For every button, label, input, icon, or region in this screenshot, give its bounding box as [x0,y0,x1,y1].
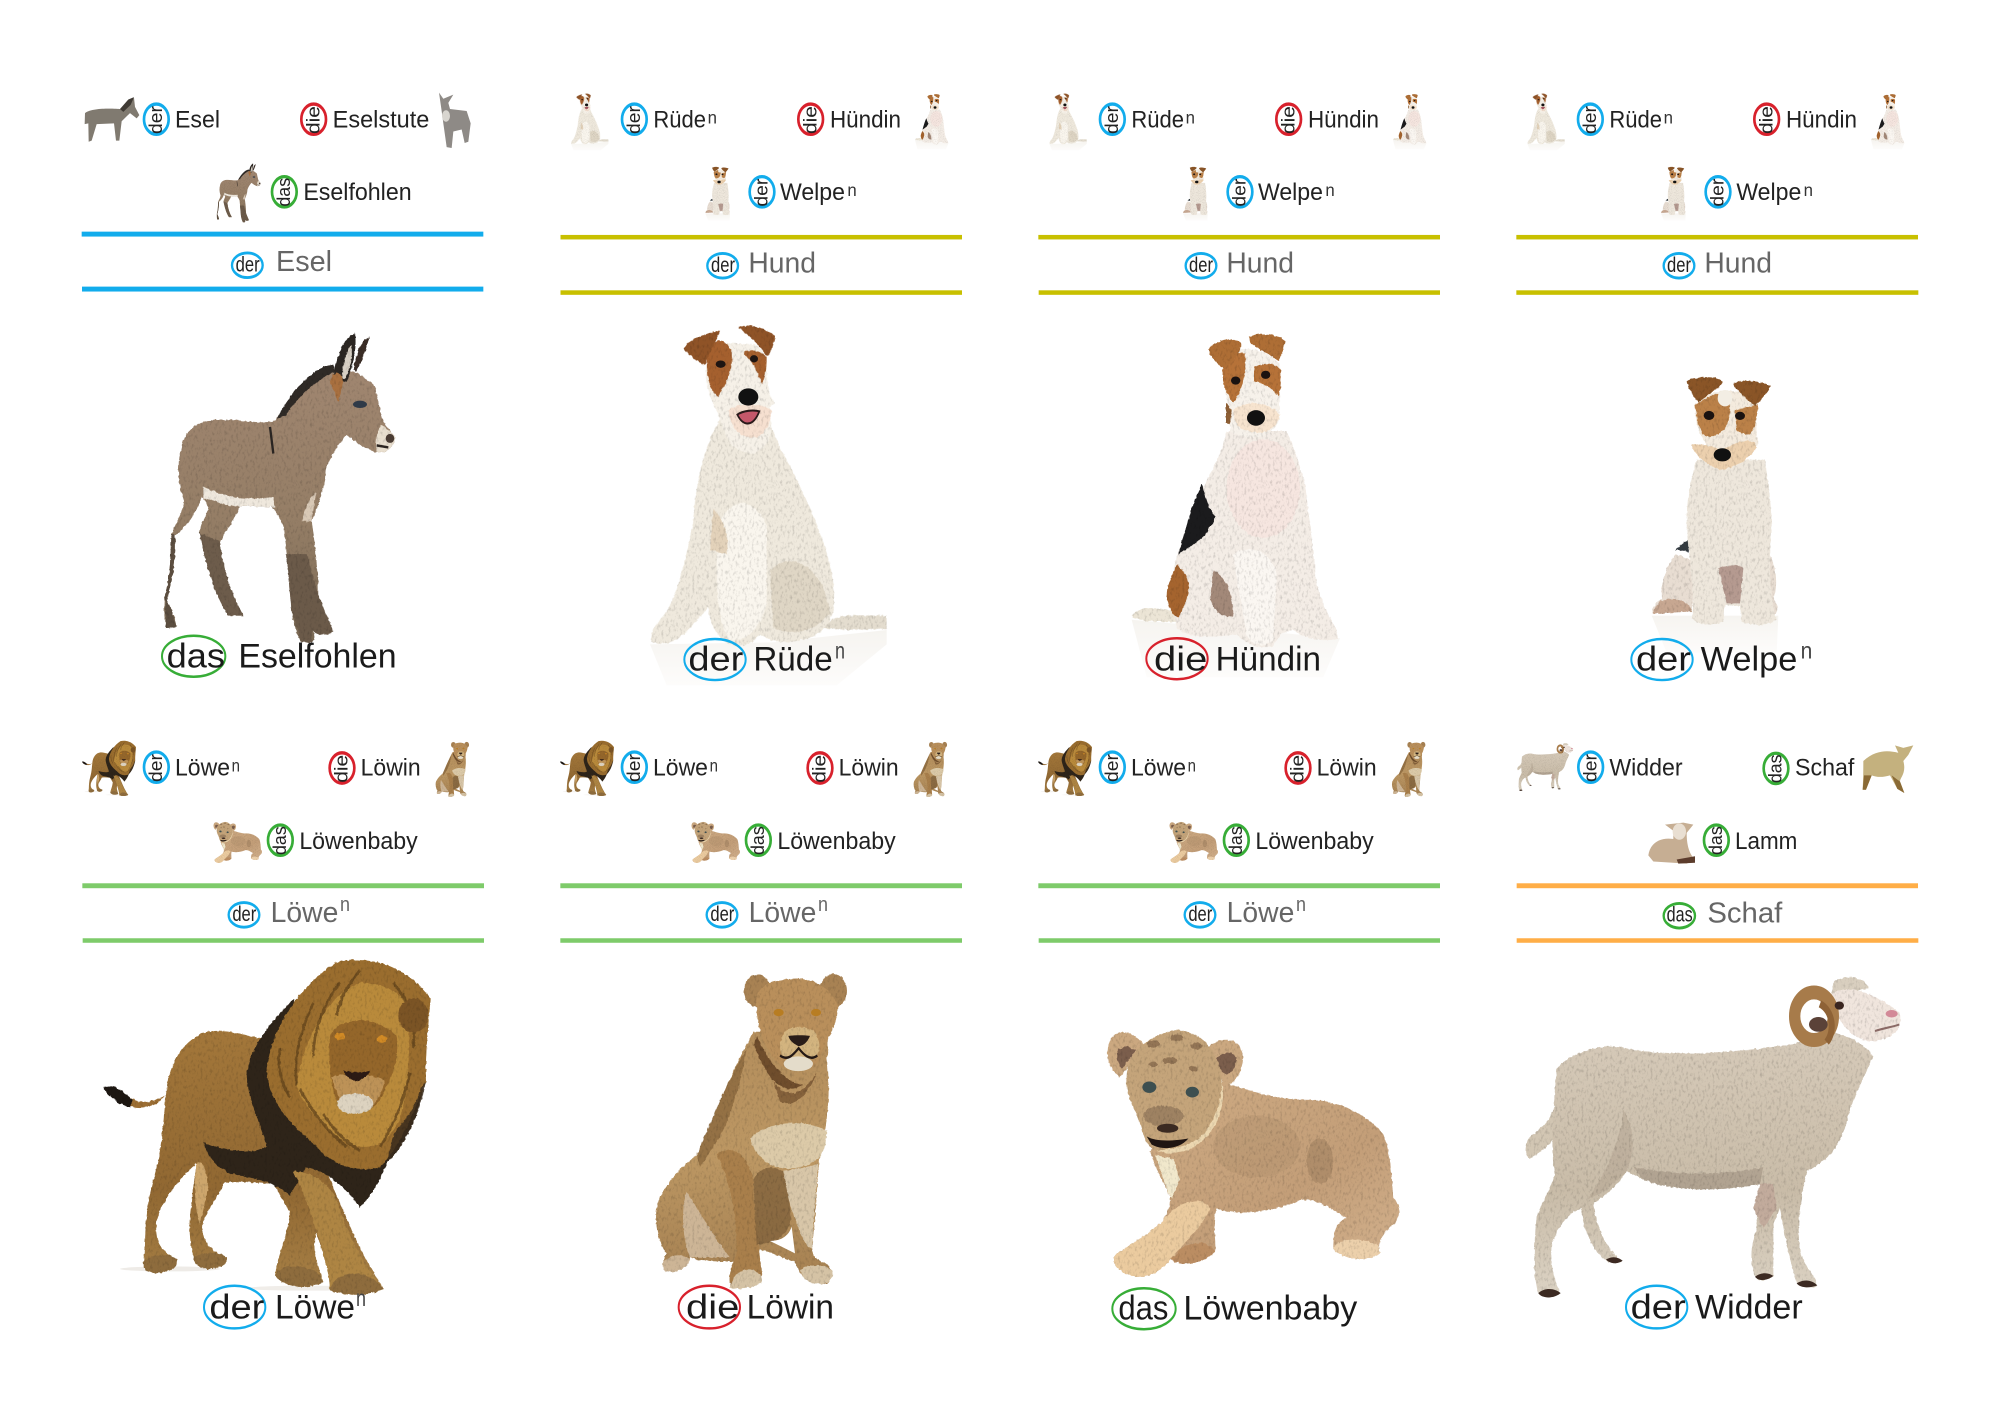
illustration: Welpe [1652,377,1778,653]
label: der Welpe: Welpe [780,178,845,206]
panel: der Hund / der Rüde [560,94,962,685]
caption: der Rüde: n [835,639,845,664]
panel: der Löwe [82,741,484,1328]
caption: die Hündin: Hündin [1216,640,1321,678]
icon: small lamb [1648,823,1695,864]
label: der Widder: der [1580,754,1601,782]
label: der Löwe: n [232,757,240,776]
icon: small cub [691,822,740,863]
label: die Löwin: die [332,755,352,783]
label: die Hündin [1754,104,1857,134]
heading: das Schaf: Schaf [1707,896,1783,929]
label: das Lamm: das [1706,826,1726,855]
label: die Hündin: die [1278,106,1299,134]
caption: die Löwin: Löwin [747,1288,834,1326]
label: die Hündin [798,104,901,134]
label: der Widder: Widder [1609,753,1683,781]
heading: der Löwe: der [710,902,735,927]
heading: der Hund: der [1667,253,1691,277]
label: die Löwin: Löwin [1317,753,1377,781]
label: der Esel [144,104,220,134]
label: der Löwe [622,752,718,782]
label: die Hündin: Hündin [1786,105,1857,133]
caption: der Löwe: der [209,1288,264,1326]
icon: small Hündin [1871,94,1905,149]
heading: der Löwe: der [1188,902,1213,927]
icon: small donkey [85,97,139,142]
label: das Löwenbaby [746,825,896,855]
label: die Hündin: Hündin [830,105,901,133]
label: der Welpe: Welpe [1258,178,1323,206]
label: der Löwe: Löwe [1131,753,1186,781]
label: der Welpe [750,177,857,207]
icon: small Rüde [1049,94,1087,150]
icon: small lion [560,741,614,796]
icon: small Rüde [1527,94,1565,150]
panel: das Löwenbaby [1038,741,1440,1329]
label: der Löwe [144,752,240,782]
label: das Schaf: das [1766,754,1786,783]
label: die Eselstute: die [303,106,324,134]
label: der Welpe: Welpe [1736,178,1801,206]
label: der Esel: der [146,106,166,134]
label: das Lamm: Lamm [1735,827,1797,855]
icon: small cub [1169,822,1218,863]
caption: das Löwenbaby [1112,1288,1358,1329]
heading: der Esel: der [236,253,260,277]
label: der Löwe: der [624,754,644,782]
label: das Löwenbaby: das [1226,826,1246,855]
label: das Schaf: Schaf [1795,753,1855,781]
label: die Löwin [1286,753,1377,783]
caption: der Rüde [684,639,845,680]
label: die Löwin: die [1288,755,1308,783]
label: das Löwenbaby: das [748,826,768,855]
caption: der Welpe: Welpe [1701,640,1797,678]
label: das Eselfohlen: Eselfohlen [303,178,412,206]
illustration: lion cub [1107,1030,1400,1277]
icon: small Welpe [705,167,730,221]
panel: der Esel / das Eselfohlen [82,93,483,677]
illustration: ram [1526,977,1900,1297]
label: der Löwe: der [146,754,166,782]
label: der Widder [1578,752,1683,782]
label: der Löwe: n [1188,757,1196,776]
label: die Löwin: Löwin [839,753,899,781]
caption: das Löwenbaby: das [1118,1289,1168,1327]
heading: der Esel [232,245,332,278]
label: der Welpe: n [1325,182,1335,200]
caption: der Löwe: n [356,1287,366,1312]
label: die Löwin: die [810,755,830,783]
heading: das Schaf: das [1667,903,1693,927]
label: das Löwenbaby: das [270,826,290,855]
caption: die Hündin [1146,638,1321,679]
label: die Löwin [808,753,899,783]
caption: der Welpe: der [1636,640,1691,678]
caption: das Eselfohlen: das [167,637,225,675]
icon: small Welpe [1661,167,1686,221]
label: das Eselfohlen: das [274,178,294,207]
label: das Löwenbaby: Löwenbaby [299,827,418,855]
heading: der Löwe: n [818,892,828,915]
label: der Rüde [1100,104,1195,134]
label: der Rüde: der [624,106,644,134]
label: die Hündin: die [800,106,821,134]
label: der Löwe: Löwe [653,753,708,781]
label: der Rüde: Rüde [1131,105,1184,133]
caption: das Eselfohlen: Eselfohlen [238,637,397,675]
icon: small foal [217,163,261,222]
label: die Hündin [1276,104,1379,134]
label: das Löwenbaby [268,825,418,855]
label: der Rüde: n [1664,109,1673,128]
heading: der Hund: Hund [1226,246,1294,279]
label: der Löwe: Löwe [175,753,230,781]
label: der Löwe: der [1102,754,1122,782]
icon: small ram [1517,743,1573,791]
heading: der Löwe [229,892,350,928]
icon: small Hündin [915,94,949,149]
label: das Löwenbaby: Löwenbaby [777,827,896,855]
heading: der Löwe: Löwe [1227,896,1294,928]
heading: der Löwe: n [1296,892,1306,915]
panel: der Hund / der Welpe [1516,94,1918,680]
heading: das Schaf [1664,896,1783,929]
label: die Löwin: Löwin [361,753,421,781]
heading: der Löwe: der [232,902,257,927]
caption: der Widder: der [1631,1288,1686,1326]
label: der Welpe: der [1230,179,1250,207]
icon: small Welpe [1183,167,1208,221]
heading: der Esel: Esel [276,245,332,278]
caption: der Welpe: n [1801,639,1812,664]
label: der Welpe [1706,177,1813,207]
panel: der Hund / die Hündin [1038,94,1440,679]
label: der Welpe: n [847,182,857,200]
label: der Rüde: n [708,109,717,128]
heading: der Löwe: n [340,892,350,915]
illustration: lion [103,960,431,1295]
caption: der Löwe: Löwe [275,1288,355,1326]
caption: der Welpe [1631,639,1812,680]
caption: der Widder: Widder [1695,1288,1803,1326]
caption: der Rüde: der [688,640,743,678]
label: der Welpe: n [1804,182,1813,200]
illustration: Hündin [1132,335,1340,677]
label: die Hündin: die [1756,106,1777,134]
label: das Löwenbaby [1224,825,1374,855]
label: der Welpe: der [752,179,772,207]
caption: das Löwenbaby: Löwenbaby [1183,1289,1358,1327]
heading: der Löwe [1185,892,1306,928]
heading: der Hund: der [711,253,735,277]
heading: der Hund: der [1189,253,1213,277]
label: das Löwenbaby: Löwenbaby [1255,827,1374,855]
icon: small cub [213,822,262,863]
label: der Esel: Esel [175,105,220,133]
caption: der Widder [1626,1286,1803,1328]
caption: die Hündin: die [1154,640,1207,678]
illustration: Rüde [650,326,887,685]
label: der Welpe [1228,177,1335,207]
label: der Rüde [622,104,717,134]
icon: small lioness [436,742,469,797]
label: der Rüde: der [1102,106,1122,134]
caption: die Löwin [679,1286,834,1328]
heading: der Löwe [707,892,828,928]
heading: der Hund: Hund [748,246,816,279]
panel: das Schaf / der Widder [1517,743,1918,1328]
label: der Löwe [1100,752,1196,782]
label: die Eselstute [301,104,429,134]
label: das Eselfohlen [272,177,412,207]
icon: small Rüde [571,94,608,150]
icon: small jenny [439,93,471,148]
icon: small lion [1038,741,1092,796]
heading: der Hund [707,246,816,279]
illustration: donkey foal [164,333,394,642]
label: der Löwe: n [710,757,718,776]
caption: das Eselfohlen [162,636,397,677]
label: die Eselstute: Eselstute [333,105,429,133]
icon: small lioness [1392,742,1425,797]
icon: small sheep [1863,745,1913,793]
label: die Löwin [330,753,421,783]
heading: der Löwe: Löwe [749,896,816,928]
heading: der Hund: Hund [1704,246,1772,279]
caption: der Rüde: Rüde [753,640,833,678]
icon: small lion [82,741,136,796]
heading: der Löwe: Löwe [271,896,338,928]
label: das Lamm [1704,825,1797,855]
label: der Rüde: Rüde [653,105,706,133]
label: die Hündin: Hündin [1308,105,1379,133]
heading: der Hund [1664,246,1772,279]
label: der Welpe: der [1708,179,1728,207]
icon: small Hündin [1393,94,1427,149]
heading: der Hund [1186,246,1294,279]
caption: der Löwe [204,1286,366,1328]
label: der Rüde: n [1186,109,1195,128]
illustration: lioness [656,974,847,1289]
caption: die Löwin: die [686,1288,739,1326]
icon: small lioness [914,742,947,797]
label: das Schaf [1764,753,1855,784]
panel: die Löwin [560,741,962,1328]
label: der Rüde [1578,104,1673,134]
label: der Rüde: Rüde [1609,105,1662,133]
label: der Rüde: der [1580,106,1600,134]
